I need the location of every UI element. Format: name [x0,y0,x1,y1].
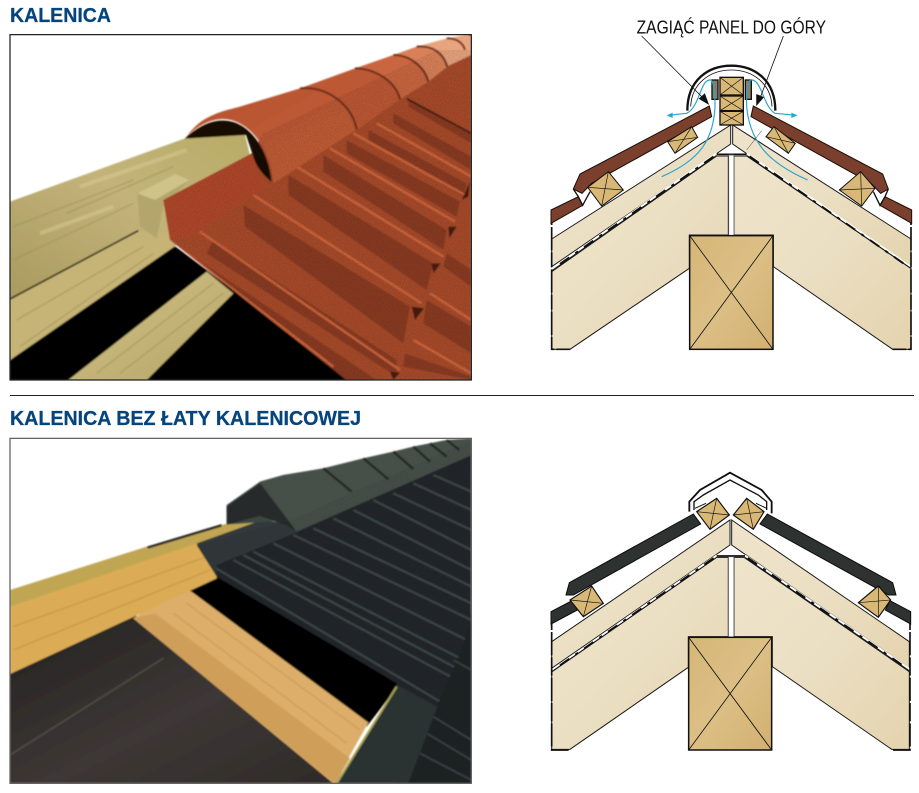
king post [728,557,734,637]
membrane lines [552,153,911,271]
main cap body with rounded arch [187,88,357,183]
battens [570,498,891,617]
heading: KALENICA BEZ ŁATY KALENICOWEJ: KALENICA BEZ ŁATY KALENICOWEJ [10,408,361,430]
rounded cap [687,66,775,111]
lower rafters [552,557,909,749]
battens [588,127,875,206]
ridge cap [227,438,471,532]
wall ends [552,210,911,349]
underlay sheet [10,613,340,783]
wall ends [552,612,910,750]
lower tile courses [405,620,471,783]
top beam upper face [10,522,254,608]
thin dark flashing [147,524,222,549]
ridge beam [10,135,250,298]
main beam [689,637,772,750]
black void [189,576,398,728]
rafter [133,591,368,783]
pointer arrows [642,36,783,105]
red tile [160,33,473,380]
diagram: ventilated ridge section with rounded cap [551,16,912,349]
photo: dark ridge cap without ridge batten [10,437,473,783]
lower board [10,232,177,360]
speckle texture [197,440,470,697]
small batten block [138,184,184,238]
diagram: ridge section without ridge batten [551,473,911,750]
heading: KALENICA: KALENICA [10,5,111,27]
label: ZAGIĄĆ PANEL DO GÓRY: ZAGIĄĆ PANEL DO GÓRY [637,16,826,37]
tile step folds [573,189,888,205]
main beam [690,236,773,349]
brown roof tiles [551,106,912,223]
ventilation airflow lines [662,80,808,180]
upper rafters [552,125,911,267]
upper rafters [552,520,909,668]
dark roof tiles [551,514,911,624]
membrane lines [552,555,909,672]
top beam front face [10,543,217,674]
rafter [68,272,233,380]
king post [729,155,734,236]
lower rafters [552,156,911,349]
ridge cap sections [417,35,471,67]
dark roof panel [196,454,471,702]
ridge roll [197,521,298,577]
black void under the roof [10,240,353,380]
ridge cap outline [689,473,772,513]
speckle texture [163,50,471,380]
divider [10,394,914,396]
photo: red ridge cap on timber batten [10,33,473,380]
arch shadow [184,121,272,182]
dark backing behind lower roof corner [397,613,471,783]
ridge timber stack [712,77,751,125]
